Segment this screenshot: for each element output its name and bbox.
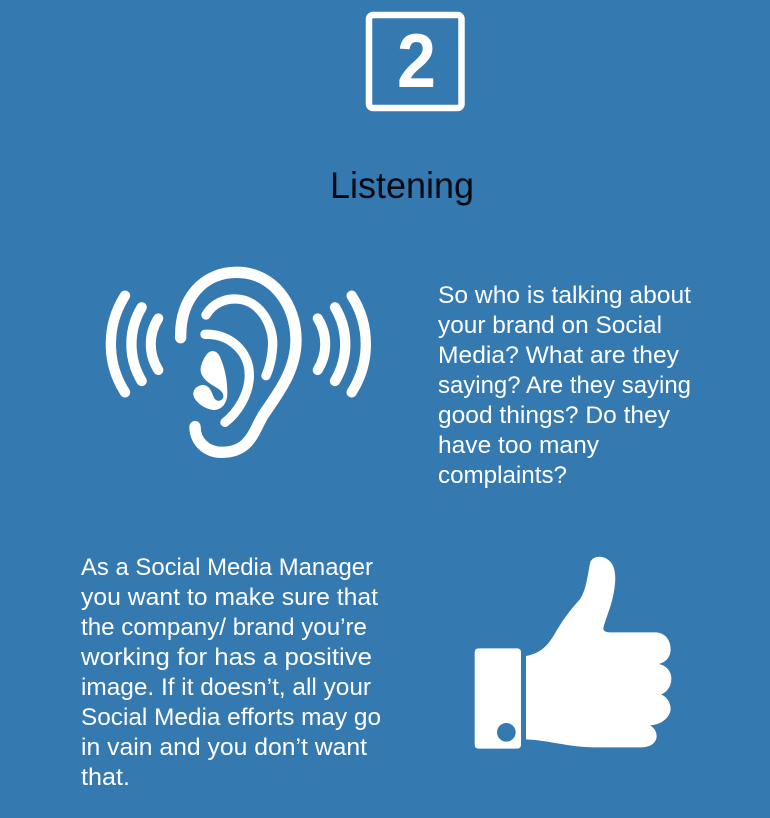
text block: positive image: the company/ brand you’re bbox=[81, 614, 367, 641]
text block: positive image: image. If it doesn’t, all your bbox=[81, 674, 371, 701]
text block: who is talking: have too many bbox=[438, 432, 600, 459]
text block: positive image: Social Media efforts may go bbox=[81, 704, 381, 731]
text block: positive image: in vain and you don’t want bbox=[81, 734, 367, 761]
text block: who is talking: complaints? bbox=[438, 462, 567, 489]
number badge: 2 bbox=[369, 15, 462, 108]
text block: who is talking: saying? Are they saying bbox=[438, 372, 691, 399]
text block: positive image: working for has a positive bbox=[80, 644, 372, 671]
number badge: 2: 2 bbox=[397, 19, 436, 104]
text block: who is talking: So who is talking about bbox=[438, 282, 691, 309]
icon: ear with sound waves bbox=[111, 272, 366, 452]
text block: positive image: you want to make sure that bbox=[81, 584, 378, 611]
text block: who is talking bbox=[438, 282, 691, 489]
text block: who is talking: your brand on Social bbox=[438, 312, 662, 339]
text block: positive image: As a Social Media Manager bbox=[81, 554, 373, 581]
text block: who is talking: good things? Do they bbox=[438, 402, 671, 429]
text block: positive image: that. bbox=[81, 764, 130, 791]
text block: positive image bbox=[80, 554, 381, 791]
icon: thumbs up bbox=[475, 557, 671, 749]
heading: Listening: Listening bbox=[330, 165, 474, 206]
text block: who is talking: Media? What are they bbox=[438, 342, 680, 369]
